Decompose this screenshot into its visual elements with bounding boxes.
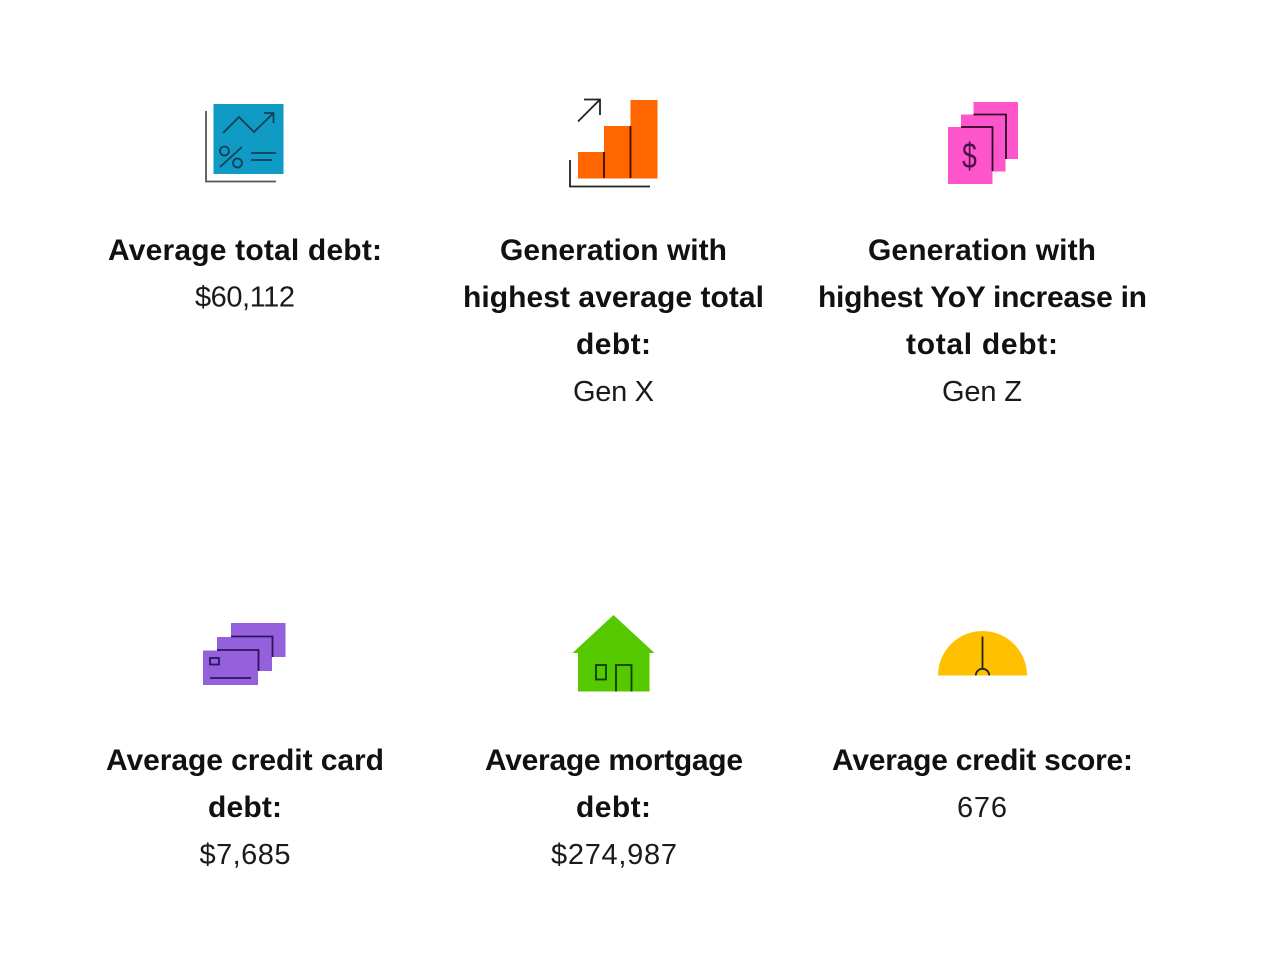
value: Gen Z: Gen Z [942, 376, 1022, 408]
icon: orange rising bars [570, 100, 658, 186]
heading: average credit score: Average credit score: [832, 744, 1133, 777]
value: Gen X: Gen X [573, 376, 654, 408]
value: average mortgage debt: $274,987 [551, 839, 677, 871]
heading: generation with highest average total debt: debt: [576, 328, 651, 361]
heading: generation with highest YoY increase in total debt: total debt: [906, 328, 1058, 361]
icon: yellow credit score gauge [938, 631, 1027, 676]
value: average credit score: 676 [957, 792, 1007, 824]
panel: average credit score [832, 631, 1133, 824]
heading: generation with highest average total debt: highest average total [463, 281, 764, 314]
heading: generation with highest YoY increase in total debt: highest YoY increase in [818, 281, 1147, 314]
icon: pink stacked bills with dollar sign [948, 102, 1018, 184]
value: average credit card debt: $7,685 [200, 839, 290, 871]
value: average total debt: $60,112 [195, 282, 295, 314]
panel: average mortgage debt [485, 615, 743, 871]
heading: average mortgage debt: debt: [576, 791, 651, 824]
panel: generation with highest YoY increase [818, 102, 1147, 408]
heading: average credit card debt: Average credit card [106, 744, 384, 777]
icon: blue chart card with percent [206, 104, 284, 182]
heading: generation with highest YoY increase in total debt [818, 234, 1147, 361]
heading: average mortgage debt [485, 744, 743, 824]
panel: average total debt [108, 104, 382, 314]
panel: generation with highest average total debt [463, 100, 764, 408]
icon: green house [572, 615, 654, 692]
heading: average total debt: Average total debt: [108, 234, 382, 267]
icon: pink stacked bills with dollar sign: $ [962, 135, 977, 176]
icon: purple stacked credit cards [203, 623, 286, 685]
heading: generation with highest YoY increase in total debt: Generation with [868, 234, 1096, 267]
heading: average credit card debt [106, 744, 384, 824]
heading: generation with highest average total debt: Generation with [500, 234, 727, 267]
heading: generation with highest average total debt [463, 234, 764, 361]
panel: average credit card debt [106, 623, 384, 871]
heading: average mortgage debt: Average mortgage [485, 744, 743, 777]
heading: average credit card debt: debt: [208, 791, 282, 824]
